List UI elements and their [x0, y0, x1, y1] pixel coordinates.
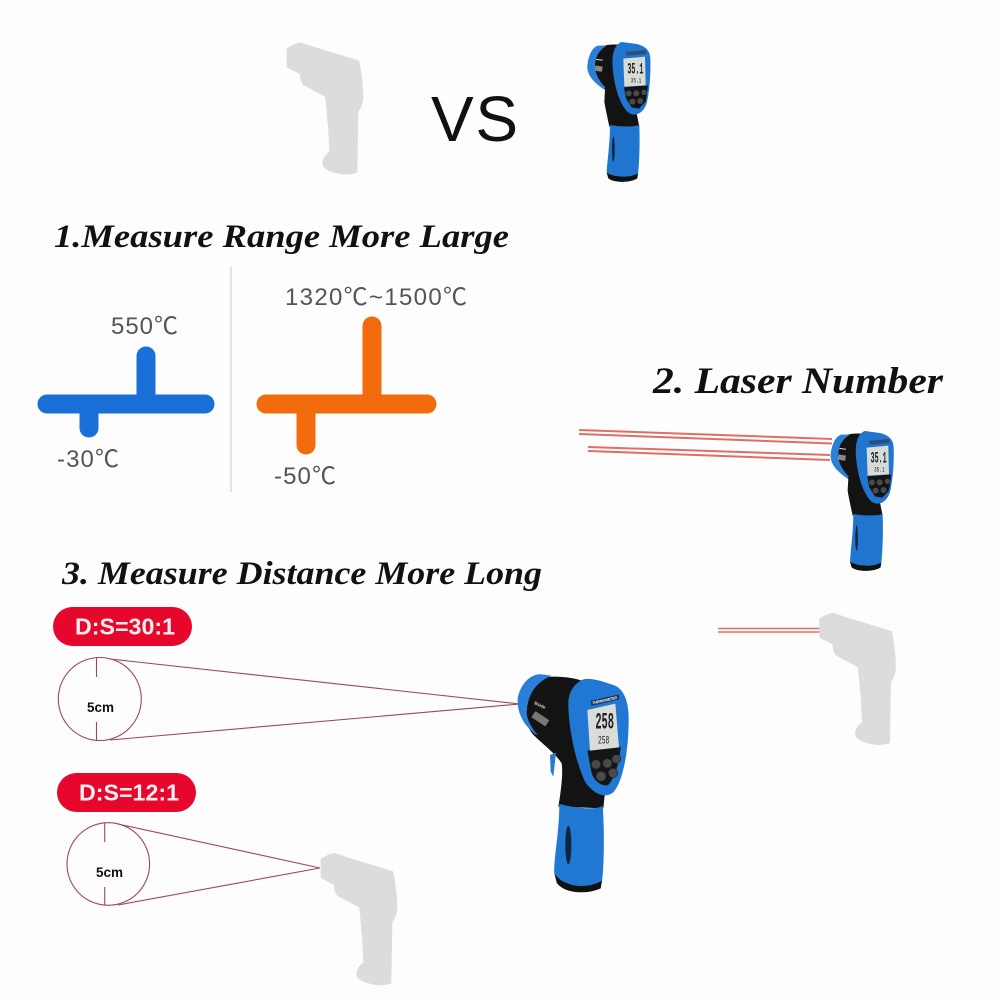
badge: D:S 12:1 — [57, 773, 196, 812]
VS label: VS — [431, 83, 518, 155]
thermometer: blue product top: 35.1 — [627, 60, 643, 78]
thermometer: large product: Bside — [534, 700, 547, 710]
thermometer: large product: 258 — [598, 735, 609, 747]
badge: D:S 30:1 — [53, 607, 192, 646]
chart: extended range bar — [266, 326, 427, 445]
heading: measure distance: 3. Measure Distance More Long — [61, 556, 542, 592]
silhouette: 12:1 thermometer — [321, 853, 397, 985]
label: -50: -50℃ — [274, 463, 336, 490]
thermometer: dual laser: 35.1 — [871, 449, 887, 467]
laser beam: single — [718, 628, 821, 632]
label: 550: 550℃ — [111, 313, 178, 340]
badge: D:S 12:1: D:S=12:1 — [79, 780, 179, 806]
heading: laser number: 2. Laser Number — [652, 361, 944, 402]
thermometer: large product: 258 — [595, 711, 614, 737]
chart: standard range bar — [47, 356, 205, 428]
silhouette: generic thermometer top — [287, 42, 363, 175]
thermometer: large product: THERMOMETER — [592, 696, 618, 705]
thermometer: blue product top — [587, 42, 650, 182]
laser beams: dual — [579, 430, 832, 460]
thermometer: blue product top: 35.1 — [631, 76, 641, 84]
spot diagram: 12:1: 5cm — [96, 865, 123, 880]
label: 1320 to 1500: 1320℃~1500℃ — [285, 284, 467, 311]
badge: D:S 30:1: D:S=30:1 — [75, 614, 175, 640]
spot diagram: 30:1: 5cm — [87, 700, 114, 715]
spot diagram: 12:1 — [67, 823, 320, 905]
label: -30: -30℃ — [57, 446, 119, 473]
heading: measure range: 1.Measure Range More Large — [54, 219, 509, 255]
spot diagram: 30:1 — [58, 658, 520, 741]
thermometer: large product — [518, 674, 629, 892]
divider — [230, 267, 232, 492]
thermometer: dual laser — [831, 431, 894, 571]
thermometer: dual laser: 35.1 — [874, 465, 885, 473]
silhouette: single laser thermometer — [819, 613, 896, 745]
